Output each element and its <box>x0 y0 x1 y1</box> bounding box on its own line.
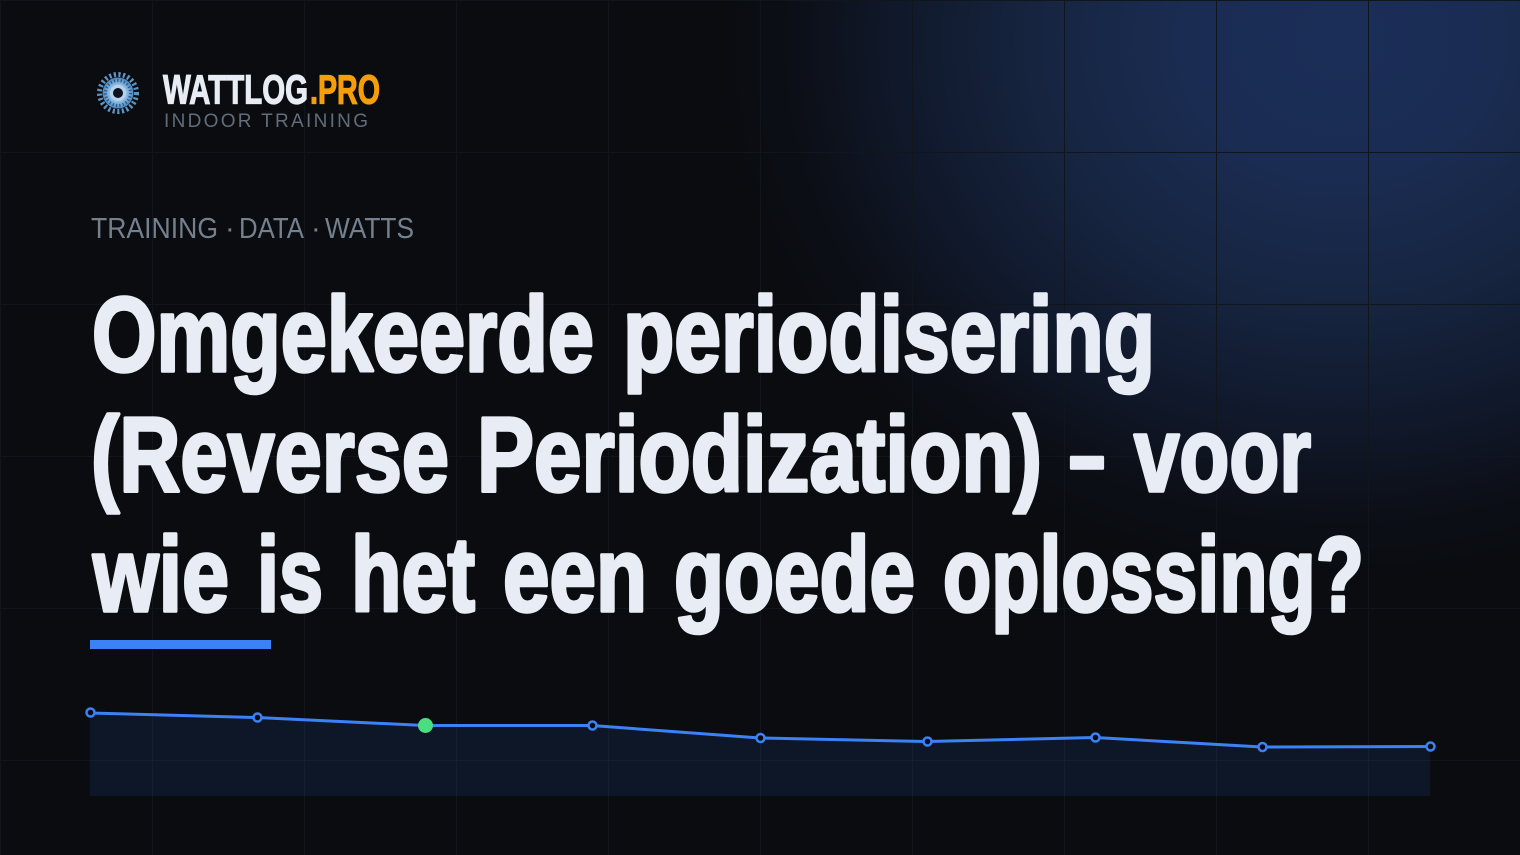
title: Omgekeerde <box>92 276 594 394</box>
logo wordmark: .PRO <box>310 66 380 112</box>
title: voor <box>1134 396 1311 514</box>
title <box>91 276 1364 634</box>
tagline: TRAINING <box>91 213 218 245</box>
tagline: WATTS <box>325 213 414 245</box>
tagline: · <box>311 213 321 245</box>
title: periodisering <box>623 276 1155 394</box>
tagline: · <box>225 213 235 245</box>
line chart <box>86 708 1434 796</box>
title: het <box>351 516 475 634</box>
title: – <box>1069 396 1105 514</box>
title: oplossing? <box>943 516 1364 634</box>
chart line <box>90 713 1430 747</box>
title: een <box>503 516 647 634</box>
chart points <box>86 708 1434 751</box>
icon: cassette gear <box>100 74 136 112</box>
logo wordmark: WATTLOG <box>163 66 308 112</box>
logo subtitle: INDOOR TRAINING <box>164 111 368 132</box>
title: is <box>257 516 323 634</box>
highlighted point <box>418 718 433 733</box>
logo <box>100 66 380 132</box>
tagline: DATA <box>239 213 305 245</box>
title: Periodization) <box>477 396 1042 514</box>
title: (Reverse <box>91 396 449 514</box>
title: wie <box>92 516 229 634</box>
title underline <box>90 640 271 649</box>
tagline <box>91 213 414 245</box>
chart area <box>90 713 1430 796</box>
title: goede <box>674 516 915 634</box>
